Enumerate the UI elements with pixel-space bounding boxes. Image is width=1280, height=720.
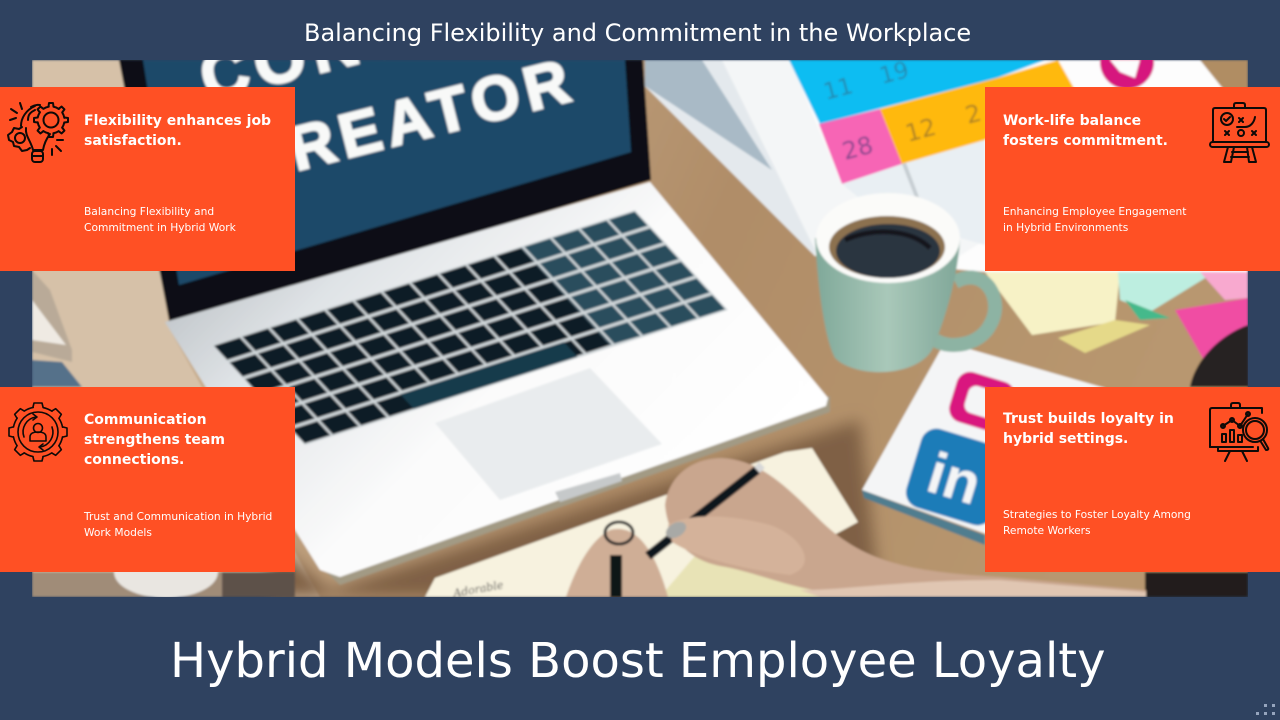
icon: gear with person <box>8 402 68 462</box>
social media tablet: in <box>920 440 988 518</box>
text: communication subtitle <box>84 510 272 539</box>
left desk items <box>32 270 295 598</box>
heading: communication: connections. <box>84 452 184 468</box>
heading: flexibility <box>84 112 271 148</box>
icon: lightbulb with gears <box>7 102 69 163</box>
text: flexibility subtitle: Commitment in Hybrid Work <box>84 221 236 234</box>
panel: trust <box>985 387 1280 572</box>
notebook and calendar: 12 <box>902 113 939 148</box>
laptop lid and screen: REATOR <box>282 46 582 185</box>
notebook and calendar <box>645 35 1248 272</box>
coffee mug <box>815 193 995 372</box>
heading: trust: Trust builds loyalty in <box>1003 410 1174 426</box>
laptop base with keyboard <box>165 182 830 585</box>
writing paper <box>425 448 858 600</box>
heading: flexibility: Flexibility enhances job <box>84 112 271 128</box>
top heading: Balancing Flexibility and Commitment in the Workplace <box>304 19 971 47</box>
text: trust subtitle: Strategies to Foster Loyalty Among <box>1003 508 1191 521</box>
text: communication subtitle: Work Models <box>84 526 152 539</box>
heading: communication <box>84 412 225 468</box>
icon: strategy board on easel <box>1209 102 1270 163</box>
laptop lid and screen <box>119 0 651 325</box>
photo: laptop on a desk with coffee, calendar and hands writing <box>32 60 1248 597</box>
text: flexibility subtitle <box>84 205 236 234</box>
text: trust subtitle <box>1003 508 1191 537</box>
text: work-life subtitle: Enhancing Employee Engagement <box>1003 205 1186 218</box>
writing paper: Adorable <box>451 578 505 600</box>
heading: work-life balance <box>1003 112 1168 148</box>
social media tablet <box>862 342 1105 560</box>
panel: work-life balance <box>985 87 1280 271</box>
sticky notes and person <box>985 272 1248 597</box>
notebook and calendar: 28 <box>839 131 876 166</box>
hands and pen <box>566 458 1146 597</box>
text: work-life subtitle: in Hybrid Environments <box>1003 221 1128 234</box>
heading: work-life balance: Work-life balance <box>1003 112 1141 128</box>
notebook and calendar: 19 <box>877 57 912 90</box>
text: flexibility subtitle: Balancing Flexibility and <box>84 205 214 218</box>
panel: flexibility <box>0 87 295 271</box>
main title: Hybrid Models Boost Employee Loyalty <box>170 633 1106 689</box>
panel: communication <box>0 387 295 572</box>
notebook and calendar: 11 <box>821 73 856 106</box>
heading: communication: Communication <box>84 412 207 428</box>
heading: trust: hybrid settings. <box>1003 430 1128 446</box>
text: work-life subtitle <box>1003 205 1186 234</box>
heading: trust <box>1003 410 1174 446</box>
corner dotted mark <box>1256 704 1275 715</box>
heading: work-life balance: fosters commitment. <box>1003 132 1168 148</box>
heading: communication: strengthens team <box>84 432 225 448</box>
text: trust subtitle: Remote Workers <box>1003 524 1091 537</box>
notebook and calendar: 2 <box>962 99 984 130</box>
text: communication subtitle: Trust and Communication in Hybrid <box>84 510 272 522</box>
icon: presentation chart with magnifier <box>1209 402 1270 462</box>
heading: flexibility: satisfaction. <box>84 132 182 148</box>
